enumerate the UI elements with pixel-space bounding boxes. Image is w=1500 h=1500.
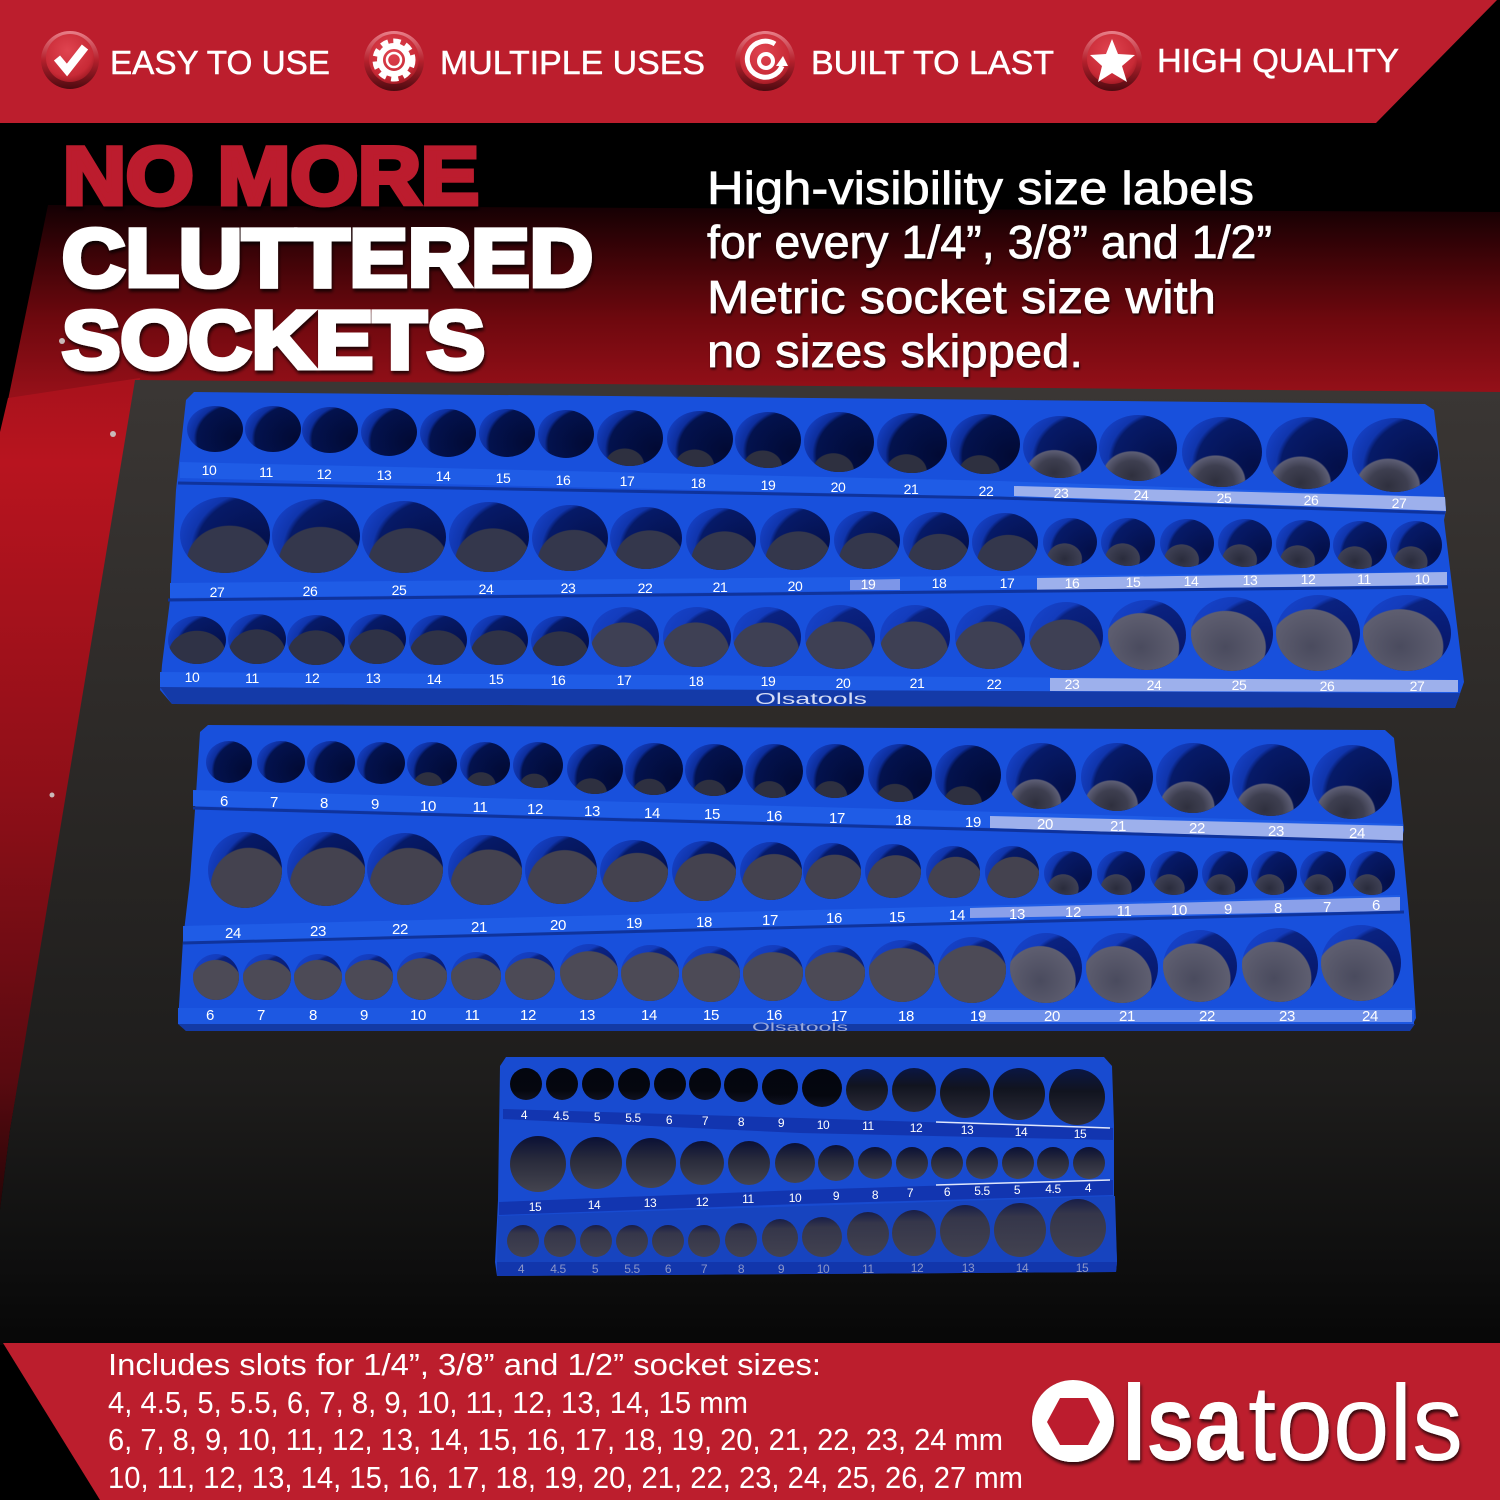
rack row 1 labels: 13 bbox=[961, 1123, 974, 1137]
rack row 3 labels: 6 bbox=[665, 1262, 672, 1276]
rack row 1 labels: 8 bbox=[320, 795, 328, 812]
rack row 3 labels: 14 bbox=[427, 671, 442, 687]
rack row 1 labels: 12 bbox=[527, 801, 543, 818]
rack row 3 labels: 9 bbox=[360, 1007, 368, 1024]
rack row 1 holes bbox=[510, 1068, 1105, 1125]
rack row 3 labels: 21 bbox=[1119, 1008, 1135, 1025]
rack row 2 labels: 24 bbox=[479, 581, 494, 597]
rack row 3 labels: 24 bbox=[1362, 1008, 1378, 1025]
rack row 2 labels: 4.5 bbox=[1045, 1182, 1061, 1196]
rack row 1 labels: 17 bbox=[829, 810, 845, 827]
rack row 3 labels: 10 bbox=[410, 1007, 426, 1024]
rack row 2 labels: 18 bbox=[696, 914, 712, 931]
rack row 2 labels: 6 bbox=[944, 1185, 951, 1199]
rack row 1 labels: 24 bbox=[1134, 487, 1149, 503]
rack row 1 labels: 5.5 bbox=[625, 1111, 641, 1125]
large socket rack: 10 to 27 mm bbox=[160, 392, 1464, 708]
rack row 2 labels: 22 bbox=[638, 580, 653, 596]
rack row 1 labels: 7 bbox=[270, 794, 278, 811]
rack row 2 labels: 14 bbox=[1184, 573, 1199, 589]
rack row 2 labels: 5 bbox=[1014, 1183, 1021, 1197]
rack row 1 holes bbox=[187, 406, 1438, 492]
rack row 2 labels: 15 bbox=[529, 1200, 542, 1214]
feature: built to last bbox=[735, 31, 1054, 91]
rack row 3 labels: 8 bbox=[309, 1007, 317, 1024]
rack row 3 labels: 13 bbox=[579, 1007, 595, 1024]
feature: multiple uses bbox=[364, 31, 705, 91]
rack row 2 labels: 19 bbox=[626, 915, 642, 932]
rack row 1 labels: 20 bbox=[1037, 816, 1053, 833]
rack row 2 labels: 10 bbox=[1171, 902, 1187, 919]
rack row 1 labels: 22 bbox=[979, 483, 994, 499]
rack row 3 labels: 15 bbox=[489, 671, 504, 687]
rack row 3 labels bbox=[206, 1007, 1378, 1025]
rack row 3 labels: 27 bbox=[1410, 678, 1425, 694]
rack row 1 labels: 4.5 bbox=[553, 1109, 569, 1123]
rack row 3 labels: 17 bbox=[831, 1008, 847, 1025]
rack row 3 labels: 26 bbox=[1320, 678, 1335, 694]
rack row 3 labels: 23 bbox=[1279, 1008, 1295, 1025]
rack row 1 labels: 15 bbox=[496, 470, 511, 486]
rack row 1 labels: 11 bbox=[259, 464, 273, 480]
rack row 2 labels: 7 bbox=[907, 1186, 914, 1200]
rack row 2 labels: 19 bbox=[861, 576, 876, 592]
socket sizes text: Includes slots for 1/4”, 3/8” and 1/2” socket sizes: bbox=[108, 1347, 821, 1382]
description text bbox=[707, 162, 1272, 377]
small socket rack: 4 to 15 mm bbox=[495, 1057, 1117, 1276]
rack row 1 labels: 12 bbox=[317, 466, 332, 482]
icon: check badge bbox=[41, 31, 99, 89]
rack row 2 labels bbox=[225, 897, 1380, 942]
description text: no sizes skipped. bbox=[707, 325, 1083, 377]
rack row 2 labels: 9 bbox=[1224, 901, 1232, 918]
rack row 3 labels: 23 bbox=[1065, 676, 1080, 692]
rack row 2 labels: 11 bbox=[1357, 571, 1371, 587]
rack row 2 labels: 7 bbox=[1323, 899, 1331, 916]
rack row 1 labels: 10 bbox=[202, 462, 217, 478]
description text: Metric socket size with bbox=[707, 271, 1216, 323]
rack row 3 labels: 5.5 bbox=[624, 1262, 640, 1276]
rack row 1 labels: 8 bbox=[738, 1115, 745, 1129]
rack row 2 labels: 16 bbox=[1065, 575, 1080, 591]
rack row 3 labels: 4 bbox=[518, 1262, 525, 1276]
rack row 1 labels: 14 bbox=[644, 805, 660, 822]
rack row 3 labels: 16 bbox=[766, 1007, 782, 1024]
rack row 3 labels: 25 bbox=[1232, 677, 1247, 693]
rack row 1 labels bbox=[521, 1108, 1087, 1141]
rack row 1 labels: 17 bbox=[620, 473, 635, 489]
rack row 2 labels: 13 bbox=[1243, 572, 1258, 588]
rack row 1 labels: 24 bbox=[1349, 825, 1365, 842]
rack row 3 labels: 13 bbox=[962, 1261, 975, 1275]
rack row 3 labels: 20 bbox=[836, 675, 851, 691]
rack row 3 labels: 11 bbox=[245, 670, 259, 686]
rack row 1 labels: 15 bbox=[704, 806, 720, 823]
rack row 3 labels: 9 bbox=[778, 1262, 785, 1276]
rack row 1 labels: 12 bbox=[910, 1121, 923, 1135]
rack row 2 labels: 26 bbox=[303, 583, 318, 599]
rack row 1 labels: 18 bbox=[895, 812, 911, 829]
rack row 3 labels: 15 bbox=[1076, 1261, 1089, 1275]
rack row 1 labels: 20 bbox=[831, 479, 846, 495]
header banner bbox=[0, 0, 1497, 123]
headline: CLUTTERED bbox=[62, 213, 593, 304]
rack row 1 labels: 6 bbox=[220, 793, 228, 810]
rack row 3 labels: 14 bbox=[1016, 1261, 1029, 1275]
icon: cycle gear badge bbox=[735, 31, 795, 91]
rack row 2 labels: 10 bbox=[1415, 571, 1430, 587]
Olsatools logo: lsa bbox=[1122, 1362, 1244, 1483]
rack row 1 labels: 14 bbox=[436, 468, 451, 484]
medium socket rack: 6 to 24 mm bbox=[178, 725, 1416, 1034]
rack row 2 labels: 25 bbox=[392, 582, 407, 598]
rack row 3 labels: 22 bbox=[1199, 1008, 1215, 1025]
rack row 2 labels: 12 bbox=[696, 1195, 709, 1209]
feature: multiple uses: MULTIPLE USES bbox=[440, 44, 705, 81]
rack row 1 labels: 19 bbox=[965, 814, 981, 831]
rack logo: Olsatools bbox=[755, 691, 867, 708]
rack row 3 labels: 7 bbox=[701, 1262, 708, 1276]
rack row 1 labels: 5 bbox=[594, 1110, 601, 1124]
rack row 2 holes bbox=[180, 497, 1442, 573]
rack row 3 labels: 16 bbox=[551, 672, 566, 688]
rack row 3 labels: 12 bbox=[911, 1261, 924, 1275]
rack row 3 labels: 12 bbox=[520, 1007, 536, 1024]
rack row 2 labels: 16 bbox=[826, 910, 842, 927]
rack row 2 labels: 9 bbox=[833, 1189, 840, 1203]
Olsatools logo: O bbox=[1033, 1362, 1113, 1485]
feature: high quality bbox=[1082, 31, 1399, 91]
rack row 2 labels: 17 bbox=[762, 912, 778, 929]
rack row 2 labels: 12 bbox=[1301, 571, 1316, 587]
rack row 3 labels: 14 bbox=[641, 1007, 657, 1024]
rack row 2 labels: 15 bbox=[1126, 574, 1141, 590]
feature: built to last: BUILT TO LAST bbox=[811, 44, 1054, 81]
rack row 2 labels: 27 bbox=[210, 584, 225, 600]
rack row 1 labels: 26 bbox=[1304, 492, 1319, 508]
rack row 2 labels: 17 bbox=[1000, 575, 1015, 591]
rack row 2 labels: 5.5 bbox=[974, 1184, 990, 1198]
rack row 1 labels: 16 bbox=[766, 808, 782, 825]
rack row 2 holes bbox=[208, 832, 1395, 908]
rack row 2 labels: 15 bbox=[889, 909, 905, 926]
rack row 1 labels: 9 bbox=[778, 1116, 785, 1130]
rack row 2 labels: 11 bbox=[1117, 903, 1131, 920]
rack row 1 labels: 14 bbox=[1015, 1125, 1028, 1139]
rack row 2 labels: 24 bbox=[225, 925, 241, 942]
rack row 2 labels: 23 bbox=[561, 580, 576, 596]
socket sizes text: 4, 4.5, 5, 5.5, 6, 7, 8, 9, 10, 11, 12, 13, 14, 15 mm bbox=[108, 1385, 748, 1420]
rack row 3 labels: 18 bbox=[898, 1008, 914, 1025]
rack row 3 labels: 10 bbox=[185, 669, 200, 685]
rack row 1 labels: 6 bbox=[666, 1113, 673, 1127]
rack row 1 labels: 21 bbox=[1110, 818, 1126, 835]
icon: star badge bbox=[1082, 31, 1142, 91]
rack row 3 labels: 18 bbox=[689, 673, 704, 689]
feature: high quality: HIGH QUALITY bbox=[1157, 42, 1399, 79]
Olsatools logo: tools bbox=[1248, 1362, 1463, 1483]
rack row 1 labels: 7 bbox=[702, 1114, 709, 1128]
socket sizes text: 10, 11, 12, 13, 14, 15, 16, 17, 18, 19, 20, 21, 22, 23, 24, 25, 26, 27 mm bbox=[108, 1460, 1023, 1495]
rack row 1 labels: 11 bbox=[473, 799, 487, 816]
rack row 1 labels: 15 bbox=[1074, 1127, 1087, 1141]
rack logo: Olsatools bbox=[752, 1020, 848, 1034]
rack row 2 labels: 11 bbox=[742, 1192, 755, 1206]
description text: for every 1/4”, 3/8” and 1/2” bbox=[707, 216, 1272, 268]
rack row 3 labels: 11 bbox=[465, 1007, 479, 1024]
rack row 1 labels bbox=[202, 462, 1407, 511]
rack row 3 labels: 22 bbox=[987, 676, 1002, 692]
rack row 2 labels: 4 bbox=[1085, 1181, 1092, 1195]
rack row 3 labels: 13 bbox=[366, 670, 381, 686]
rack row 2 holes bbox=[510, 1136, 1105, 1192]
rack row 1 labels: 13 bbox=[584, 803, 600, 820]
rack row 1 labels: 13 bbox=[377, 467, 392, 483]
headline bbox=[62, 131, 593, 386]
rack row 3 labels: 17 bbox=[617, 672, 632, 688]
rack row 2 labels: 21 bbox=[713, 579, 728, 595]
rack row 1 labels: 18 bbox=[691, 475, 706, 491]
rack row 2 labels: 14 bbox=[949, 907, 965, 924]
rack row 2 labels bbox=[210, 571, 1430, 600]
rack row 2 labels: 13 bbox=[644, 1196, 657, 1210]
footer banner bbox=[3, 1343, 1500, 1500]
Olsatools logo bbox=[1032, 1362, 1463, 1485]
rack row 3 labels: 7 bbox=[257, 1007, 265, 1024]
rack row 1 labels: 25 bbox=[1217, 490, 1232, 506]
rack row 1 labels: 9 bbox=[371, 796, 379, 813]
description text: High-visibility size labels bbox=[707, 162, 1254, 214]
rack row 1 labels: 23 bbox=[1054, 485, 1069, 501]
rack row 1 holes bbox=[206, 741, 1392, 819]
rack row 2 labels: 21 bbox=[471, 919, 487, 936]
rack row 2 labels: 10 bbox=[789, 1191, 802, 1205]
rack row 3 labels: 11 bbox=[862, 1262, 875, 1276]
rack row 1 labels: 10 bbox=[817, 1118, 830, 1132]
headline: NO MORE bbox=[63, 131, 479, 222]
rack row 1 labels: 22 bbox=[1189, 820, 1205, 837]
rack row 2 labels: 13 bbox=[1009, 906, 1025, 923]
rack row 1 labels: 10 bbox=[420, 798, 436, 815]
icon: gear badge bbox=[364, 31, 424, 91]
rack row 3 labels: 15 bbox=[703, 1007, 719, 1024]
rack row 3 labels: 12 bbox=[305, 670, 320, 686]
rack row 2 labels bbox=[529, 1181, 1092, 1214]
headline: SOCKETS bbox=[62, 295, 485, 386]
rack row 1 labels: 19 bbox=[761, 477, 776, 493]
rack row 2 labels: 8 bbox=[1274, 900, 1282, 917]
rack row 3 labels: 20 bbox=[1044, 1008, 1060, 1025]
rack row 2 labels: 14 bbox=[588, 1198, 601, 1212]
rack row 1 labels: 4 bbox=[521, 1108, 528, 1122]
rack row 3 labels: 6 bbox=[206, 1007, 214, 1024]
rack row 1 labels bbox=[220, 793, 1365, 842]
rack row 1 labels: 27 bbox=[1392, 495, 1407, 511]
rack row 3 labels: 10 bbox=[817, 1262, 830, 1276]
rack row 3 labels: 19 bbox=[970, 1008, 986, 1025]
rack row 2 labels: 12 bbox=[1065, 904, 1081, 921]
rack row 3 holes bbox=[193, 925, 1401, 1003]
rack row 1 labels: 11 bbox=[862, 1119, 875, 1133]
rack row 3 holes bbox=[168, 595, 1451, 671]
rack row 2 labels: 20 bbox=[550, 917, 566, 934]
rack row 3 labels bbox=[518, 1261, 1089, 1276]
rack row 1 labels: 16 bbox=[556, 472, 571, 488]
rack row 3 labels: 5 bbox=[592, 1262, 599, 1276]
rack row 3 labels: 8 bbox=[738, 1262, 745, 1276]
rack row 1 labels: 21 bbox=[904, 481, 919, 497]
rack row 2 labels: 23 bbox=[310, 923, 326, 940]
rack row 3 labels: 4.5 bbox=[550, 1262, 566, 1276]
rack row 3 labels: 19 bbox=[761, 673, 776, 689]
socket sizes text: 6, 7, 8, 9, 10, 11, 12, 13, 14, 15, 16, 17, 18, 19, 20, 21, 22, 23, 24 mm bbox=[108, 1422, 1003, 1457]
socket sizes text bbox=[108, 1347, 1023, 1495]
rack row 3 holes bbox=[507, 1199, 1106, 1257]
rack row 3 labels bbox=[185, 669, 1425, 694]
rack row 2 labels: 8 bbox=[872, 1188, 879, 1202]
rack row 2 labels: 6 bbox=[1372, 897, 1380, 914]
rack row 2 labels: 20 bbox=[788, 578, 803, 594]
rack row 3 labels: 21 bbox=[910, 675, 925, 691]
rack row 1 labels: 23 bbox=[1268, 823, 1284, 840]
feature: easy to use: EASY TO USE bbox=[110, 44, 330, 81]
rack row 2 labels: 22 bbox=[392, 921, 408, 938]
rack row 2 labels: 18 bbox=[932, 575, 947, 591]
rack row 3 labels: 24 bbox=[1147, 677, 1162, 693]
feature: easy to use bbox=[41, 31, 330, 89]
